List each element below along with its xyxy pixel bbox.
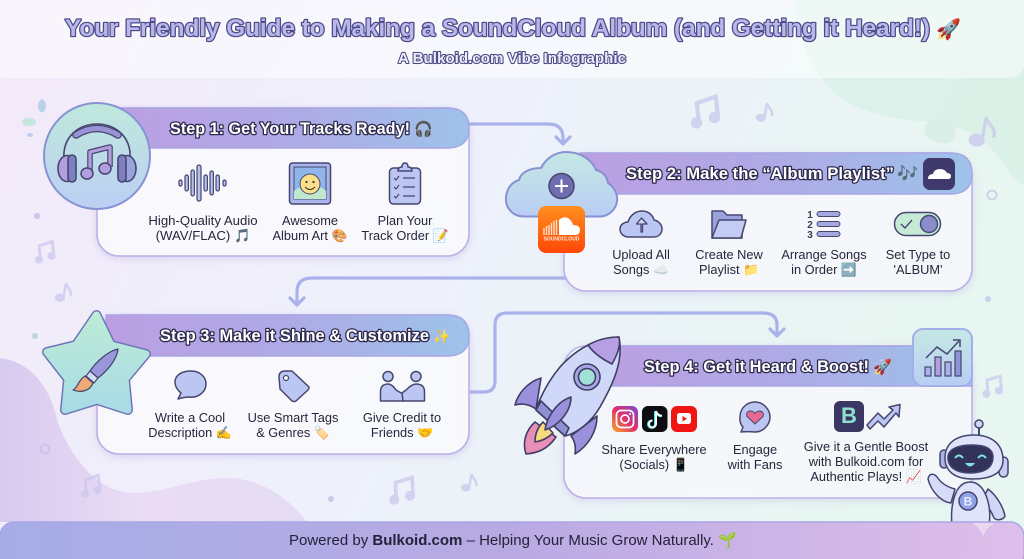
icon: numbered list: 3 bbox=[807, 230, 813, 241]
icon: white cloud badge bbox=[923, 158, 955, 190]
label: Engage bbox=[733, 442, 777, 457]
header band bbox=[0, 0, 1024, 78]
card bbox=[564, 346, 972, 498]
label: Songs ☁️ bbox=[613, 262, 669, 277]
heading: Step 2: Make the “Album Playlist” bbox=[626, 165, 894, 183]
icon: handshake bbox=[380, 372, 424, 401]
icon: YouTube bbox=[671, 406, 697, 432]
icon: SoundCloud logo: SOUNDCLOUD bbox=[544, 236, 580, 242]
icon: SoundCloud logo bbox=[538, 206, 585, 253]
background music notes bbox=[22, 96, 1003, 504]
subtitle: A Bulkoid.com Vibe Infographic bbox=[398, 50, 626, 67]
icon: rocket bbox=[515, 337, 620, 454]
icon: numbered list bbox=[807, 210, 840, 241]
icon: speech bubble bbox=[175, 371, 206, 399]
arrow: step 2 to step 3 bbox=[290, 278, 566, 305]
label: in Order ➡️ bbox=[791, 262, 857, 277]
label: Give it a Gentle Boost bbox=[804, 439, 929, 454]
icon: Bulkoid logo bbox=[834, 401, 864, 432]
label: Give Credit to bbox=[363, 410, 441, 425]
label: & Genres 🏷️ bbox=[256, 425, 330, 440]
heading: 🎶 bbox=[897, 164, 918, 183]
label: Friends 🤝 bbox=[371, 425, 433, 440]
icon: TikTok bbox=[642, 406, 668, 432]
label: Authentic Plays! 📈 bbox=[810, 469, 922, 484]
header bar bbox=[580, 153, 972, 194]
label: Create New bbox=[695, 247, 764, 262]
label: Awesome bbox=[282, 213, 338, 228]
label: Write a Cool bbox=[155, 410, 225, 425]
icon: chart badge bbox=[913, 329, 972, 386]
robot mascot bbox=[928, 420, 1008, 526]
panel: step 3 bbox=[47, 315, 469, 454]
robot mascot: B bbox=[964, 494, 973, 508]
icon: folder bbox=[712, 211, 746, 238]
panel: step 4 bbox=[515, 329, 972, 498]
icon: numbered list: 1 bbox=[807, 210, 813, 221]
label: Set Type to bbox=[886, 247, 950, 262]
label: (WAV/FLAC) 🎵 bbox=[156, 228, 250, 243]
footer bbox=[0, 522, 1024, 559]
heading: Step 4: Get it Heard & Boost! bbox=[644, 358, 869, 376]
heading: 🎧 bbox=[414, 120, 433, 138]
footer: Powered by Bulkoid.com – Helping Your Music Grow Naturally. 🌱 bbox=[289, 531, 737, 549]
icon: Instagram bbox=[612, 406, 638, 432]
header bar bbox=[120, 108, 469, 148]
label: 'ALBUM' bbox=[894, 262, 942, 277]
label: with Fans bbox=[727, 457, 782, 472]
icon: heart chat bbox=[740, 402, 770, 432]
arrow: step 3 to step 4 bbox=[469, 313, 784, 392]
icon: album art bbox=[290, 163, 330, 204]
title: 🚀 bbox=[936, 17, 961, 41]
label: (Socials) 📱 bbox=[619, 457, 689, 472]
heading: Step 1: Get Your Tracks Ready! bbox=[170, 120, 410, 138]
icon: headphones medallion bbox=[44, 103, 150, 209]
label: Album Art 🎨 bbox=[273, 228, 348, 243]
icon: growth arrow bbox=[867, 404, 900, 429]
icon: numbered list: 2 bbox=[807, 220, 813, 231]
label: Playlist 📁 bbox=[699, 262, 759, 277]
icon: clipboard checklist bbox=[390, 163, 420, 204]
icon: upload cloud bbox=[620, 211, 662, 237]
icon: tag bbox=[279, 371, 309, 402]
card bbox=[97, 315, 469, 454]
panel: step 1 bbox=[44, 103, 469, 256]
arrow: step 1 to step 2 bbox=[469, 124, 570, 144]
card bbox=[564, 153, 972, 291]
icon: Bulkoid logo: B bbox=[841, 403, 857, 428]
card bbox=[97, 108, 469, 256]
label: Arrange Songs bbox=[781, 247, 867, 262]
label: Use Smart Tags bbox=[248, 410, 338, 425]
icon: star with paintbrush bbox=[47, 315, 146, 410]
panel: step 2 bbox=[506, 152, 972, 291]
header bar bbox=[600, 346, 972, 386]
label: Plan Your bbox=[378, 213, 433, 228]
header bar bbox=[106, 315, 469, 356]
icon: toggle bbox=[894, 212, 940, 236]
label: Upload All bbox=[612, 247, 670, 262]
label: Description ✍️ bbox=[148, 425, 232, 440]
heading: Step 3: Make it Shine & Customize bbox=[160, 327, 429, 345]
label: High-Quality Audio bbox=[148, 213, 258, 228]
title: Your Friendly Guide to Making a SoundCloud Album (and Getting it Heard!) bbox=[65, 15, 930, 42]
label: Track Order 📝 bbox=[361, 228, 449, 243]
icon: waveform bbox=[179, 165, 226, 201]
icon: big cloud with plus bbox=[506, 152, 617, 216]
label: Share Everywhere bbox=[601, 442, 707, 457]
label: with Bulkoid.com for bbox=[808, 454, 924, 469]
heading: ✨ bbox=[433, 328, 450, 344]
heading: 🚀 bbox=[873, 358, 892, 376]
